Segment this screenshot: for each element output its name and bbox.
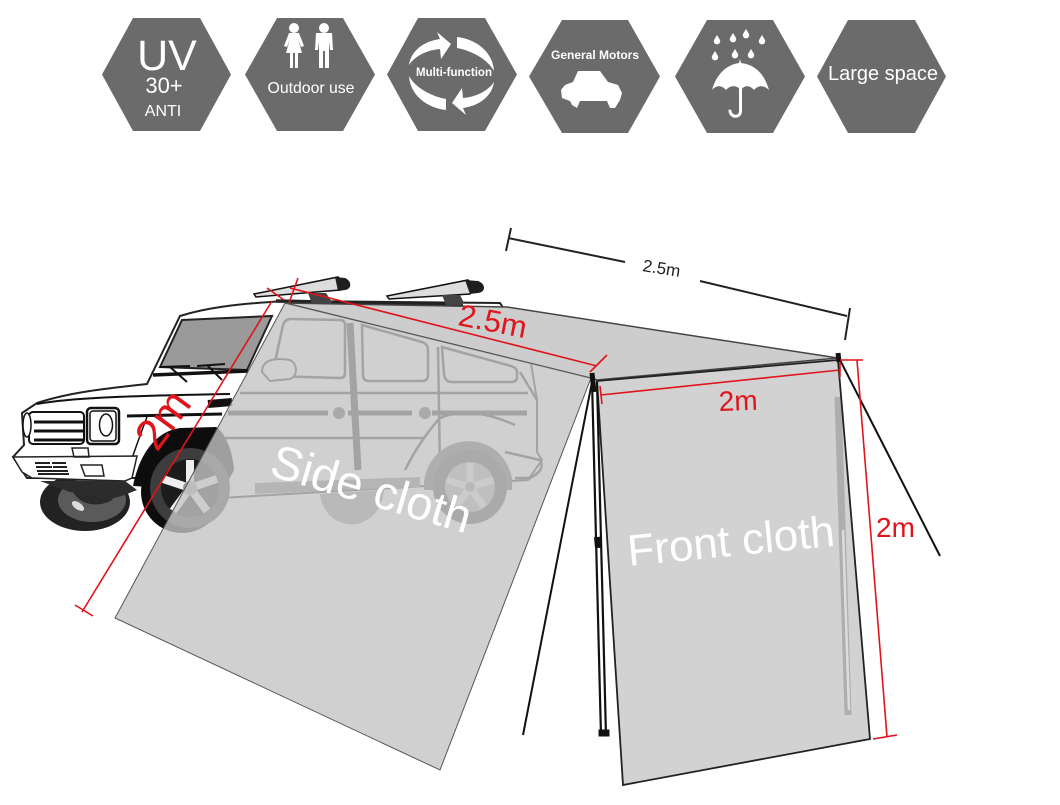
icon: UV 30+ anti: ANTI [145,103,181,120]
headlight [87,408,119,444]
side sill [255,477,420,494]
rack one [254,277,350,305]
panel: front cloth [597,360,870,785]
label: side cloth: Side cloth [265,434,478,543]
dimension: side drop 2m [75,288,284,616]
dimension: overall width 2.5m [506,228,850,340]
icon: general motors car [529,20,660,133]
wheel arch [133,427,234,487]
rear wheel [424,441,512,524]
dimension: side length 2.5m: 2.5m [456,298,530,345]
icon: general motors car: General Motors [551,48,639,62]
awning poles and guy lines [523,353,940,736]
windshield [160,316,272,370]
skid plate [40,481,137,499]
front cloth hidden pole [838,397,849,715]
dimension: front width 2m: 2m [718,385,758,417]
dimension: front drop 2m: 2m [876,512,915,543]
illustration: off-road car with roof racks [13,301,542,533]
icon: large space: Large space [828,63,938,85]
dimension: side drop 2m: 2m [125,381,201,459]
icon: UV 30+ anti: UV [137,32,197,80]
wipers and body stripes [37,364,248,478]
icon row: feature hexagons [102,18,946,133]
dimension: side length 2.5m [289,278,607,372]
bumper [13,448,137,481]
awning roof panel [285,303,838,380]
grille [23,412,84,444]
roof racks [254,277,484,305]
front right wheel [141,448,230,533]
icon: outdoor use people [245,18,375,131]
rack rail [276,301,463,305]
icon: UV 30+ anti: 30+ [145,73,183,98]
side mirror [262,359,296,381]
rack two [387,280,484,305]
icon: multi-function arrows: Multi-function [416,67,492,79]
side windows and door lines [225,319,542,478]
icon: UV 30+ anti [102,18,231,131]
dimension: overall width 2.5m: 2.5m [641,256,682,281]
icon: large space [817,20,946,133]
middle wheel behind cloth [320,490,384,524]
front left tyre [40,473,130,531]
dimension: front drop 2m [840,360,915,739]
car body outline [13,301,542,498]
dimension: front width 2m [600,362,840,417]
icon: multi-function arrows [387,18,517,131]
label: front cloth: Front cloth [625,507,837,576]
icon: umbrella and rain [675,20,805,133]
panel: side cloth [115,303,591,770]
icon: outdoor use people: Outdoor use [268,80,355,97]
